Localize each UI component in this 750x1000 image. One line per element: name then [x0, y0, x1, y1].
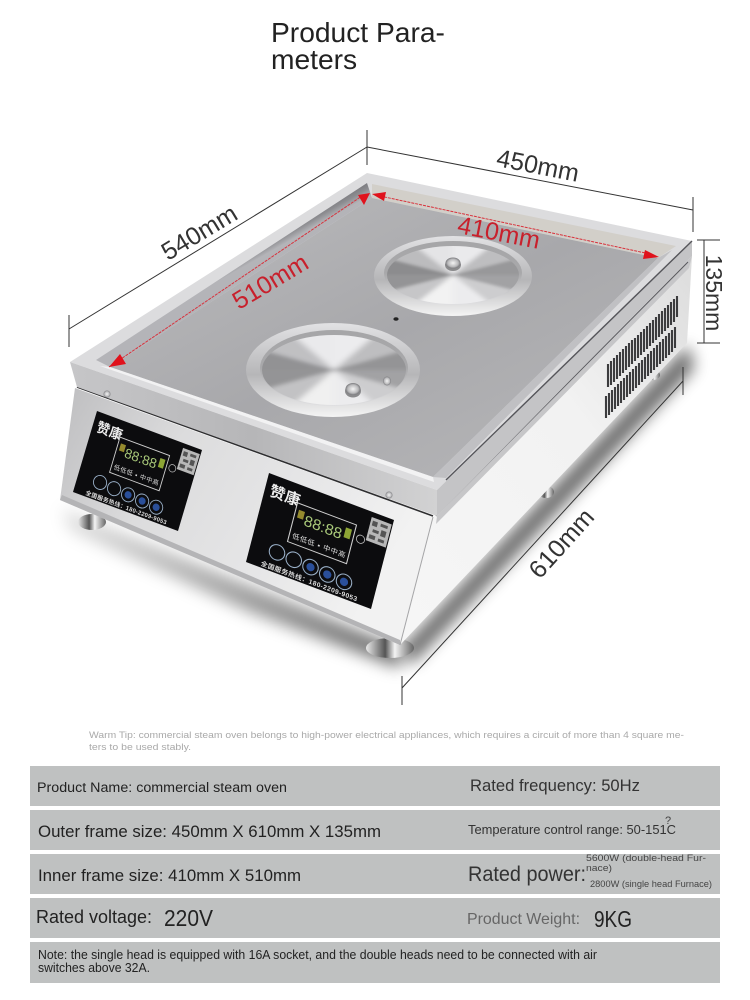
front foot — [366, 638, 414, 658]
warm tip: Warm Tip: commercial steam oven belongs to high-power electrical appliances, which requires a circuit of more than 4 square me- — [89, 730, 684, 741]
title: meters — [271, 43, 357, 75]
row: outer size and temperature — [30, 810, 720, 850]
row: note — [30, 942, 720, 983]
display: 低低低 ▪ 中中高 — [291, 531, 346, 560]
QR code — [366, 517, 392, 548]
row: outer size and temperature: ? — [665, 815, 671, 827]
display — [288, 503, 356, 564]
title — [271, 16, 445, 75]
dimension: 410mm inner width — [372, 192, 659, 259]
panel background — [246, 473, 394, 609]
row: voltage and weight: 220V — [164, 905, 214, 931]
brand logo: 赞康 — [95, 418, 125, 443]
service phone: 全国服务热线：180-2209-9053 — [85, 489, 168, 527]
lip rivet left — [104, 390, 110, 398]
plate inner right band — [433, 250, 672, 478]
QR code — [177, 448, 200, 475]
rear foot — [538, 486, 554, 498]
parameter table — [30, 766, 720, 983]
centre hole — [393, 317, 399, 321]
side panel band shading — [436, 256, 692, 524]
row: outer size and temperature: Outer frame size: 450mm X 610mm X 135mm — [38, 822, 381, 841]
brand logo: 赞康 — [268, 481, 303, 510]
row: note: Note: the single head is equipped with 16A socket, and the double heads need to be connected with air — [38, 948, 597, 962]
dimension: 510mm inner depth — [109, 193, 370, 367]
row: name and frequency — [30, 766, 720, 806]
row: inner size and power: Inner frame size: 410mm X 510mm — [38, 866, 301, 885]
row: inner size and power: 5600W (double-head Fur- — [586, 853, 706, 864]
indicator ring — [168, 464, 177, 473]
plate inner surface — [110, 198, 658, 477]
row: outer size and temperature: Temperature control range: 50-151C — [468, 822, 676, 837]
front burner — [246, 323, 420, 417]
warm tip — [89, 730, 684, 753]
left foot — [78, 514, 106, 530]
indicator ring — [356, 534, 366, 545]
dimension: 540mm outer depth — [69, 130, 367, 347]
row: inner size and power: 2800W (single head Furnace) — [590, 879, 712, 890]
ground shadow — [62, 345, 694, 668]
label: 510mm: 510mm — [228, 248, 313, 315]
touch buttons — [91, 474, 165, 516]
row: inner size and power — [30, 853, 720, 894]
row: voltage and weight: Product Weight: — [467, 911, 580, 928]
panel background — [73, 411, 202, 531]
title: Product Para- — [271, 16, 445, 48]
side seam line — [436, 262, 688, 516]
service phone: 全国服务热线：180-2209-9053 — [260, 559, 358, 603]
row: voltage and weight: 9KG — [594, 906, 632, 932]
plate inner front band — [100, 366, 434, 482]
front lip — [70, 362, 437, 516]
control panel: left — [73, 411, 202, 531]
row: voltage and weight: Rated voltage: — [36, 907, 152, 927]
row: note: switches above 32A. — [38, 961, 150, 975]
row: inner size and power: nace) — [586, 863, 612, 874]
label: 410mm: 410mm — [455, 211, 542, 255]
dimension: 610mm length — [402, 367, 683, 705]
top plate outer rim — [70, 173, 692, 490]
row: voltage and weight — [30, 898, 720, 938]
touch buttons — [267, 542, 354, 592]
dimension: 450mm outer width — [367, 147, 693, 232]
display — [110, 437, 170, 491]
side panel — [400, 256, 692, 645]
lip rivet right — [386, 492, 392, 498]
display: 88:88 — [123, 445, 159, 472]
left rim trough — [96, 183, 372, 367]
warm tip: ters to be used stably. — [89, 742, 191, 753]
side vents — [606, 296, 677, 418]
row: name and frequency: Product Name: commercial steam oven — [37, 780, 287, 795]
right lip — [437, 241, 692, 516]
seam line — [77, 387, 433, 516]
row: name and frequency: Rated frequency: 50Hz — [470, 776, 640, 795]
back rim trough — [372, 184, 676, 258]
label: 610mm: 610mm — [523, 503, 600, 584]
front bottom lip — [60, 495, 400, 645]
rear burner — [374, 236, 532, 316]
display: 低低低 ▪ 中中高 — [113, 462, 160, 487]
row: inner size and power: Rated power: — [468, 863, 586, 886]
right lip dark edge — [446, 241, 692, 480]
label: 135mm: 135mm — [701, 255, 727, 331]
product illustration: steam oven — [60, 173, 694, 668]
rear foot right — [646, 370, 660, 380]
control panel: right — [246, 473, 394, 609]
front panel — [60, 388, 433, 645]
dimension: 135mm height — [697, 240, 720, 343]
label: 450mm: 450mm — [494, 144, 581, 188]
display: 88:88 — [302, 513, 344, 543]
label: 540mm: 540mm — [157, 199, 242, 266]
front edge highlight — [400, 517, 433, 645]
